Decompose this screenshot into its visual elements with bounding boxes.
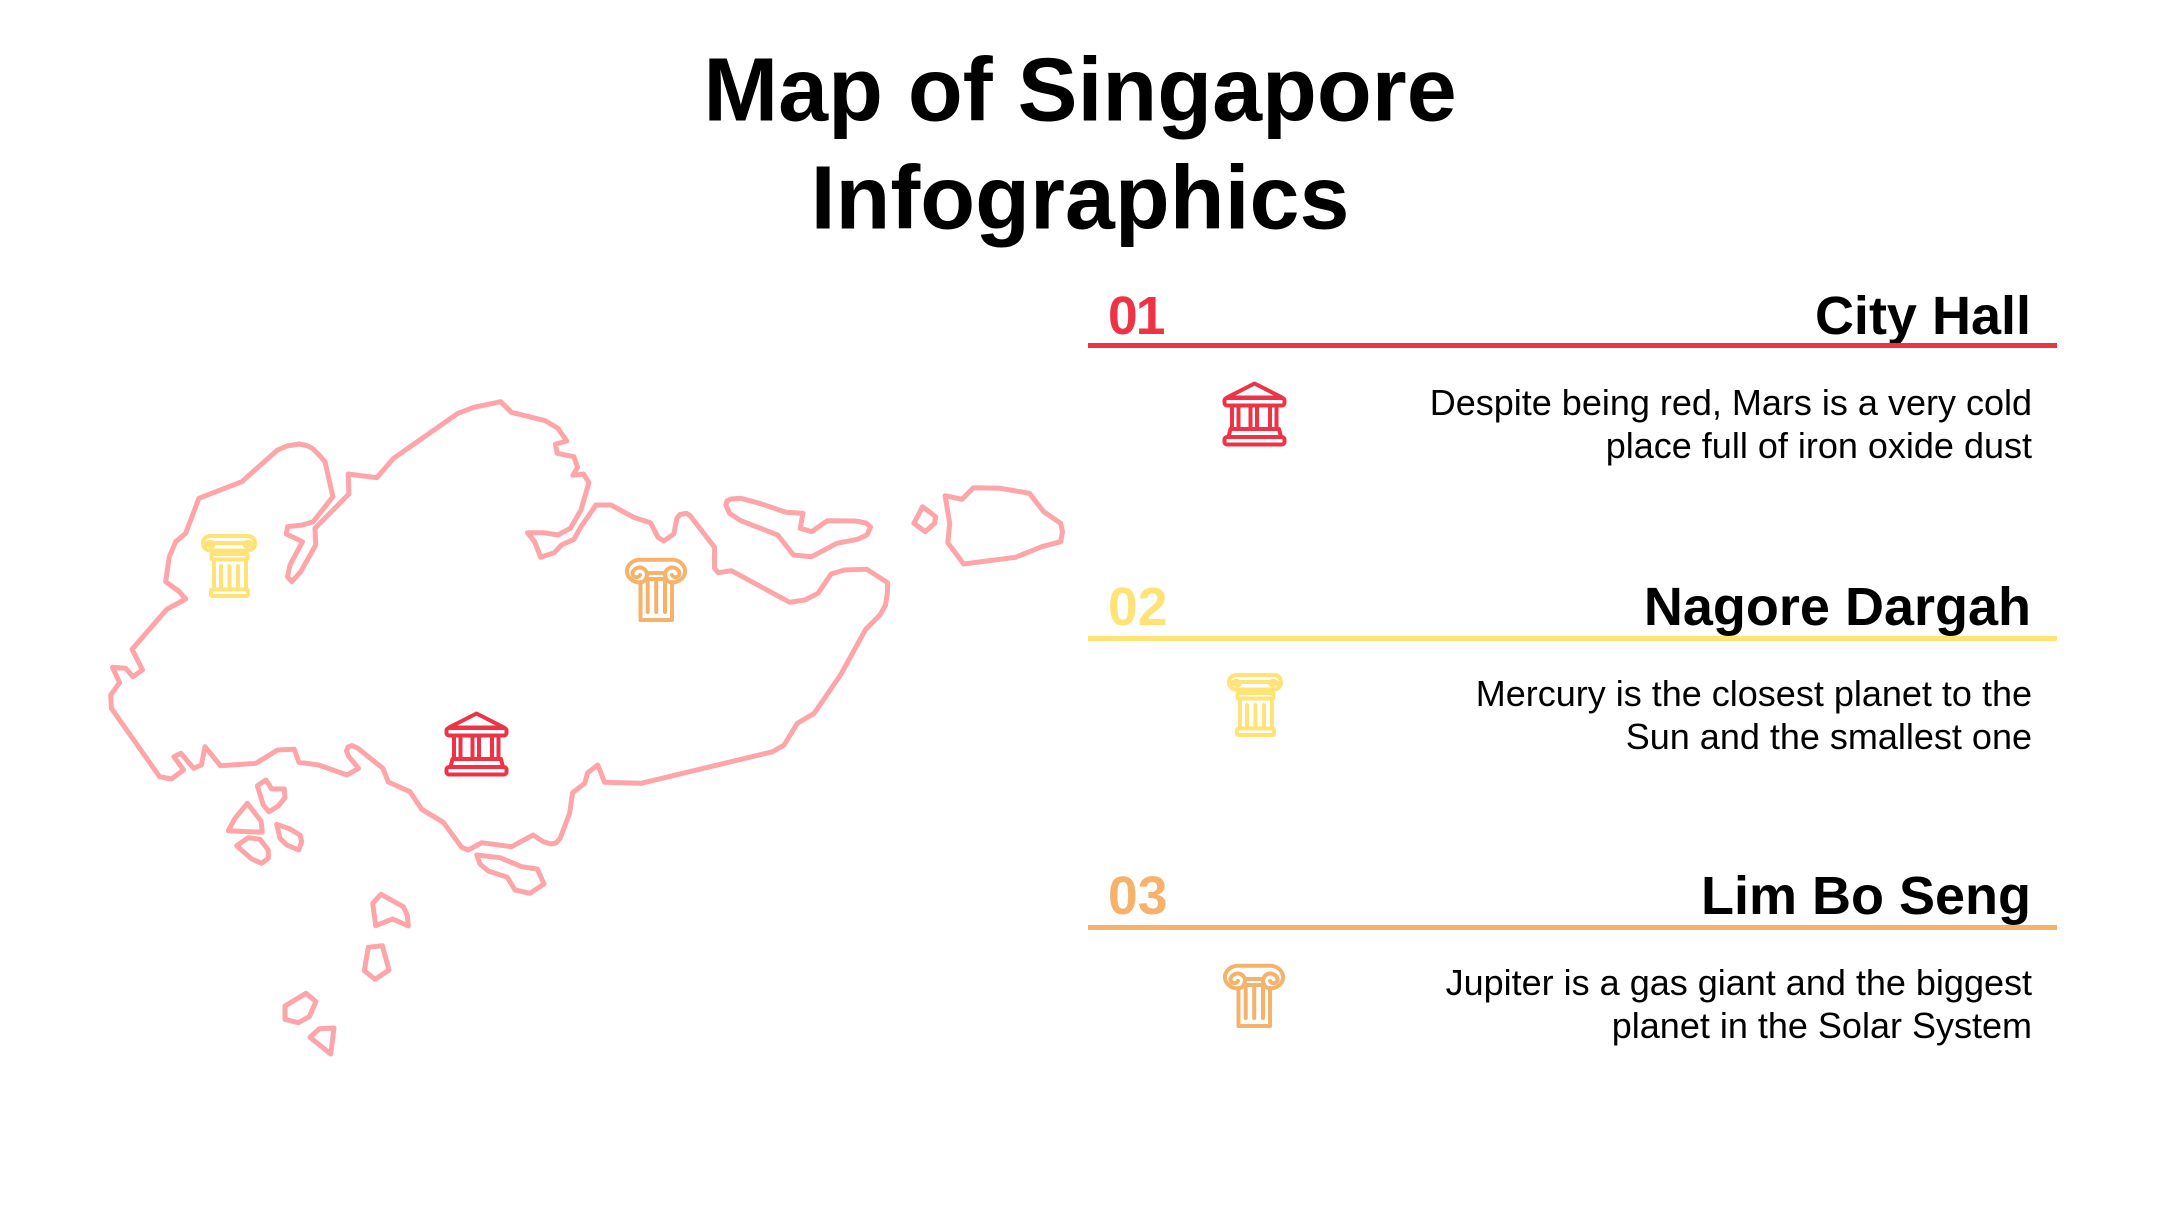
description: Despite being red, Mars is a very cold [1430, 382, 2032, 423]
icon: column [1225, 966, 1283, 1026]
panel: 01 City Hall [1088, 286, 2057, 466]
description [1476, 673, 2032, 757]
icon: map marker column (Nagore Dargah) [203, 536, 255, 596]
island: small islet [914, 507, 936, 532]
island: Pulau Tekong [945, 488, 1062, 564]
number 02: 02 [1108, 578, 1167, 637]
number 01: 01 [1108, 287, 1165, 346]
description: planet in the Solar System [1612, 1005, 2032, 1046]
icon: map marker column (Lim Bo Seng) [627, 560, 685, 620]
number 03: 03 [1108, 867, 1167, 926]
icon: column [1229, 675, 1281, 735]
rule [1088, 636, 2057, 641]
description: Sun and the smallest one [1626, 716, 2032, 757]
description: Mercury is the closest planet to the [1476, 673, 2032, 714]
map of Singapore outline [111, 402, 1062, 1054]
rule [1088, 925, 2057, 930]
description: Jupiter is a gas giant and the biggest [1446, 962, 2032, 1003]
icon: map marker temple (City Hall) [446, 714, 506, 774]
heading: City Hall: City Hall [1815, 286, 2031, 346]
icon: temple [1224, 384, 1284, 444]
panel: 03 Lim Bo Seng [1088, 866, 2057, 1046]
title: Map of Singapore [703, 40, 1457, 140]
title: Infographics [811, 148, 1349, 248]
panel: 02 Nagore Dargah [1088, 577, 2057, 757]
southern islets [228, 780, 408, 1054]
island: Pulau Ubin [726, 498, 871, 557]
heading: Nagore Dargah: Nagore Dargah [1644, 577, 2031, 637]
rule [1088, 343, 2057, 348]
title [703, 40, 1457, 248]
main island [111, 402, 888, 850]
island: Sentosa [477, 855, 544, 893]
description [1430, 382, 2032, 466]
heading: Lim Bo Seng: Lim Bo Seng [1701, 866, 2031, 926]
description [1446, 962, 2032, 1046]
description: place full of iron oxide dust [1606, 425, 2032, 466]
